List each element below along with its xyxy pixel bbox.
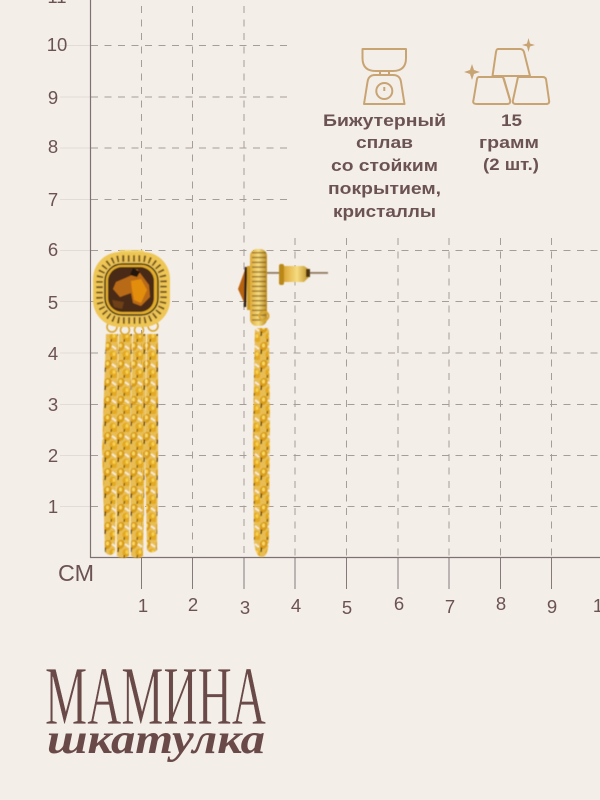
stone tip [238,267,246,307]
x axis numbers: 3 [240,597,250,618]
text: weight: 15 [501,112,522,130]
measurement grid [60,0,600,589]
logo: second word: шкатулка [47,717,265,763]
text: material [323,112,446,221]
text: material: кристаллы [333,203,436,221]
y axis numbers: 9 [48,87,58,108]
x axis numbers: 6 [394,593,404,614]
icon: kitchen scale [362,49,406,104]
text: weight: грамм [479,134,539,152]
x axis numbers: 2 [188,594,198,615]
text: material: Бижутерный [323,112,446,130]
y axis numbers: 1 [48,496,58,517]
x axis numbers: 5 [342,597,352,618]
y axis numbers: 4 [48,343,58,364]
text: weight: (2 шт.) [483,156,539,174]
logo [45,650,266,763]
y axis numbers: 3 [48,394,58,415]
y axis numbers: 5 [48,292,58,313]
post and back nut [266,264,328,285]
connector rings [107,321,158,334]
text: weight [479,112,539,174]
x axis numbers: 4 [291,595,301,616]
chain [253,328,270,557]
x axis numbers [138,593,600,618]
y axis numbers: 7 [48,189,58,210]
x axis numbers: 9 [547,596,557,617]
icon: gold bars [464,38,549,104]
plate [247,266,255,310]
y axis numbers [47,0,67,517]
x axis numbers: 7 [445,596,455,617]
chain strands [102,334,158,558]
logo: first word: МАМИНА [45,650,266,743]
text: material: со стойким [331,157,438,175]
y axis numbers: 6 [48,239,58,260]
x axis numbers: 1 [138,595,148,616]
earring: side view [238,249,328,557]
x axis numbers: 8 [496,593,506,614]
unit label: cm: СМ [58,560,94,586]
amber crystal [108,267,154,312]
connector ring [260,312,268,320]
text: material: сплав [356,134,413,152]
gold frame [119,250,144,264]
y axis numbers: 2 [48,445,58,466]
y axis numbers: 10 [47,34,67,55]
earring: front view [93,250,170,558]
y axis numbers: 8 [48,136,58,157]
text: material: покрытием, [328,180,441,198]
